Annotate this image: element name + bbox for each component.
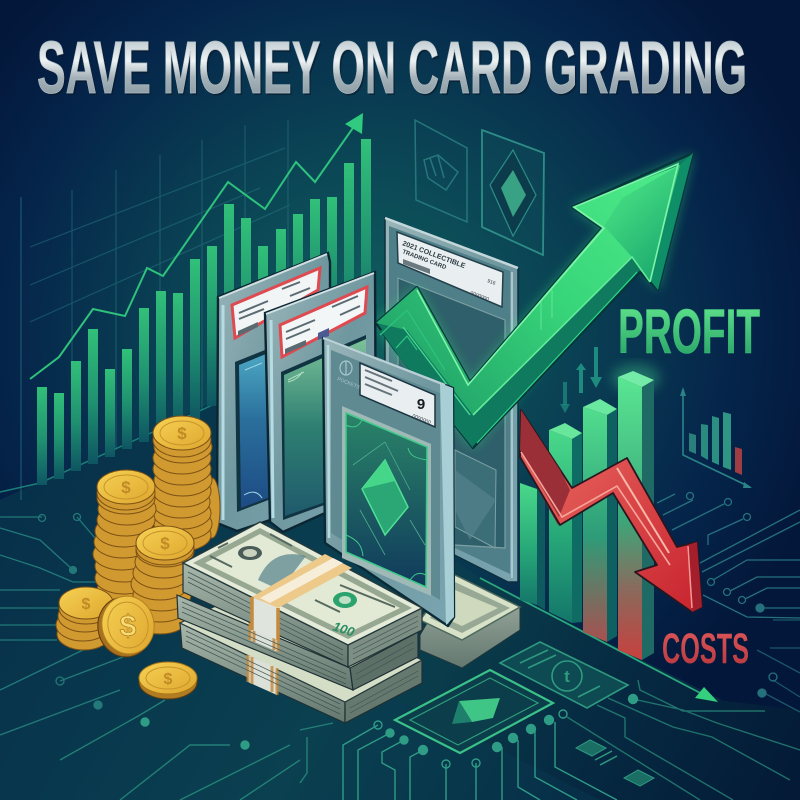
- card: rear right slab: TRADING CARD: [401, 249, 447, 271]
- money bundle: bottom: [180, 585, 422, 723]
- mini chart: [680, 387, 752, 488]
- green arrow: profit up: [376, 153, 693, 448]
- coin: standing: $: [120, 610, 137, 643]
- floor bill outline: t: [564, 667, 570, 686]
- trend line arrow: [30, 113, 363, 379]
- money bundle: middle: [177, 595, 418, 690]
- circuit traces: left: [0, 514, 123, 735]
- bars: right 3D: [520, 364, 660, 660]
- coin stack: back tall: [152, 416, 220, 551]
- card: front slab graded 9: 0000000: [411, 413, 432, 426]
- small arrows: [560, 347, 602, 413]
- card: rear right slab: 0000000: [469, 290, 490, 303]
- coin stack: middle: $: [121, 478, 131, 497]
- money bundle: top: [183, 522, 422, 667]
- card: rear right slab: 2021 COLLECTIBLE: [401, 240, 466, 270]
- card: left slab: [217, 253, 330, 531]
- circuit traces: bottom: [60, 680, 800, 800]
- coin stack: small left: $: [82, 596, 91, 613]
- coin stack: front: [131, 526, 194, 634]
- red arrow: costs down: [520, 410, 702, 612]
- outline card icon: fanned cards: [415, 120, 467, 222]
- card: rear right slab: 916: [486, 278, 496, 287]
- outline card icon: diamond: [482, 130, 544, 255]
- floor chip icons: [576, 740, 654, 786]
- coin: loose: $: [164, 671, 173, 688]
- floor arrow: [480, 578, 718, 702]
- bar chart: left: [37, 139, 371, 485]
- money bundle: top: 100: [331, 619, 357, 640]
- coin: standing: [92, 591, 159, 662]
- back money stack: [420, 575, 520, 668]
- circuit traces: right: [657, 492, 800, 712]
- floor: [0, 400, 800, 800]
- coin stack: small left: [56, 587, 113, 650]
- floor card outline: [395, 670, 553, 753]
- coin stack: back tall: $: [177, 424, 187, 443]
- card: rear right slab: [385, 218, 518, 582]
- coin stack: middle: [93, 470, 156, 606]
- coin: loose: [139, 662, 197, 699]
- floor bill outline: [500, 642, 628, 708]
- card: front slab graded 9: [323, 338, 454, 626]
- card: front slab graded 9: POCKETS: [336, 376, 361, 391]
- card: front slab graded 9: 9: [417, 396, 425, 413]
- card: middle slab: [265, 272, 376, 532]
- coin stack: front: $: [160, 534, 170, 553]
- left chart gridlines: [21, 120, 290, 500]
